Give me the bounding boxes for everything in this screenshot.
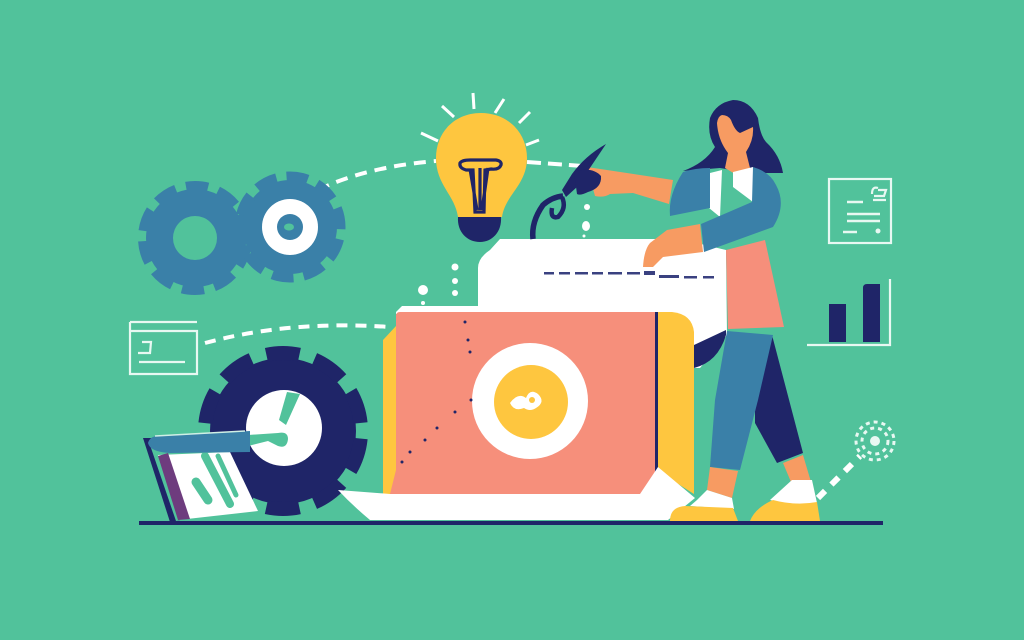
white base <box>338 467 695 520</box>
pointing arm <box>587 167 673 204</box>
front sock <box>690 490 734 509</box>
left sleeve <box>670 168 710 216</box>
tunic <box>726 240 784 329</box>
quill pen <box>533 144 606 239</box>
folder speckles <box>400 320 472 464</box>
rays <box>421 93 539 145</box>
lower hand <box>643 224 703 267</box>
back sock <box>770 480 817 504</box>
right sleeve <box>701 167 781 252</box>
navy crescent behind leg <box>694 330 726 368</box>
filament <box>460 160 501 212</box>
paper text lines <box>544 271 714 278</box>
icon: card <box>130 322 197 374</box>
front leg <box>710 331 773 470</box>
ground line <box>139 521 883 525</box>
icon: blue gear right <box>229 166 351 288</box>
paper sheet <box>478 239 727 368</box>
icon: sparkle <box>856 422 894 460</box>
shirt <box>720 170 753 218</box>
person <box>587 100 820 521</box>
bulb glass <box>436 113 527 217</box>
dashed connector: shoe to sparkle <box>818 456 860 498</box>
icon: navy gear with clock <box>197 345 369 517</box>
neck and face <box>717 115 753 174</box>
icon: document <box>829 179 891 243</box>
icon: bar chart <box>807 279 890 345</box>
icon: blue gear left <box>137 180 253 296</box>
icon: light bulb <box>421 93 539 242</box>
folder front <box>390 312 656 494</box>
dashed connector: bulb to hand <box>527 162 583 166</box>
dashed connector: gears to bulb <box>318 161 436 190</box>
dots above folder <box>418 204 590 305</box>
back ankle <box>783 455 811 482</box>
back shoe <box>750 500 820 521</box>
folder badge <box>472 343 588 459</box>
front ankle <box>707 467 738 498</box>
front shoe <box>670 506 738 521</box>
dashed connector: card to folder <box>205 325 390 343</box>
icon: tablet <box>143 431 258 522</box>
folder <box>383 306 694 494</box>
folder top strip <box>396 306 480 314</box>
hair <box>683 100 783 173</box>
folder yellow back <box>383 326 396 494</box>
back leg <box>755 335 803 463</box>
bulb base <box>458 217 501 242</box>
